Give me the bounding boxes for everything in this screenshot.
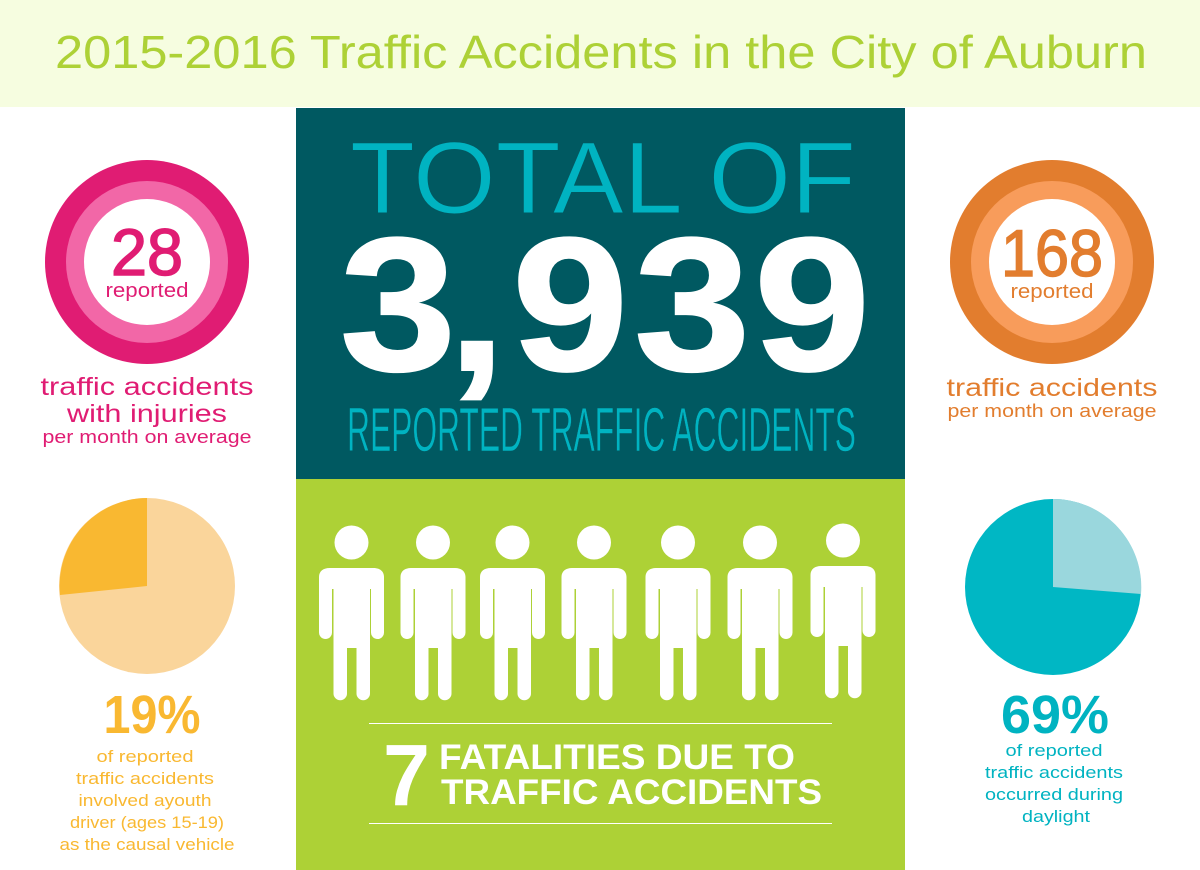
fatalities text: TRAFFIC ACCIDENTS <box>441 773 822 812</box>
text: monthly caption <box>946 374 1158 421</box>
panel: total accidents <box>296 108 905 479</box>
stat ring: injuries <box>45 160 249 364</box>
text: daylight stat: of reported <box>1006 741 1102 760</box>
text: injuries caption: traffic accidents <box>40 373 254 401</box>
icons: seven people <box>319 524 876 700</box>
fatalities text: 7 <box>383 727 430 824</box>
pie chart: youth driver <box>59 498 235 674</box>
text: daylight stat: 69% <box>1001 685 1109 745</box>
text: youth driver stat: traffic accidents <box>76 769 214 788</box>
text: youth driver stat <box>60 685 234 854</box>
stat ring: injuries: reported <box>106 280 188 302</box>
text: monthly caption: traffic accidents <box>946 374 1158 402</box>
panel: fatalities <box>296 479 905 870</box>
text: injuries caption <box>40 373 254 447</box>
text: daylight stat: traffic accidents <box>985 763 1123 782</box>
fatalities text: FATALITIES DUE TO <box>439 738 795 777</box>
title banner: 2015-2016 Traffic Accidents in the City of Auburn <box>55 26 1147 78</box>
title banner <box>0 0 1200 107</box>
fatalities text <box>383 727 822 824</box>
text: daylight stat: daylight <box>1022 807 1090 826</box>
text: injuries caption: with injuries <box>66 400 227 428</box>
stat ring: accidents per month: reported <box>1010 281 1094 303</box>
text: youth driver stat: as the causal vehicle <box>60 835 234 854</box>
stat ring: accidents per month: 168 <box>1001 216 1103 290</box>
text: youth driver stat: of reported <box>96 747 194 766</box>
text: monthly caption: per month on average <box>948 401 1156 421</box>
panel: total accidents: TOTAL OF <box>350 121 856 235</box>
text: youth driver stat: 19% <box>104 685 200 745</box>
stat ring: accidents per month <box>950 160 1154 364</box>
pie chart: daylight <box>965 499 1141 675</box>
text: youth driver stat: involved ayouth <box>78 791 212 810</box>
text: daylight stat: occurred during <box>985 785 1123 804</box>
stat ring: injuries: 28 <box>111 215 183 289</box>
text: injuries caption: per month on average <box>42 427 252 447</box>
text: youth driver stat: driver (ages 15-19) <box>70 813 224 832</box>
text: daylight stat <box>985 685 1123 826</box>
panel: total accidents: 3,939 <box>340 199 870 411</box>
